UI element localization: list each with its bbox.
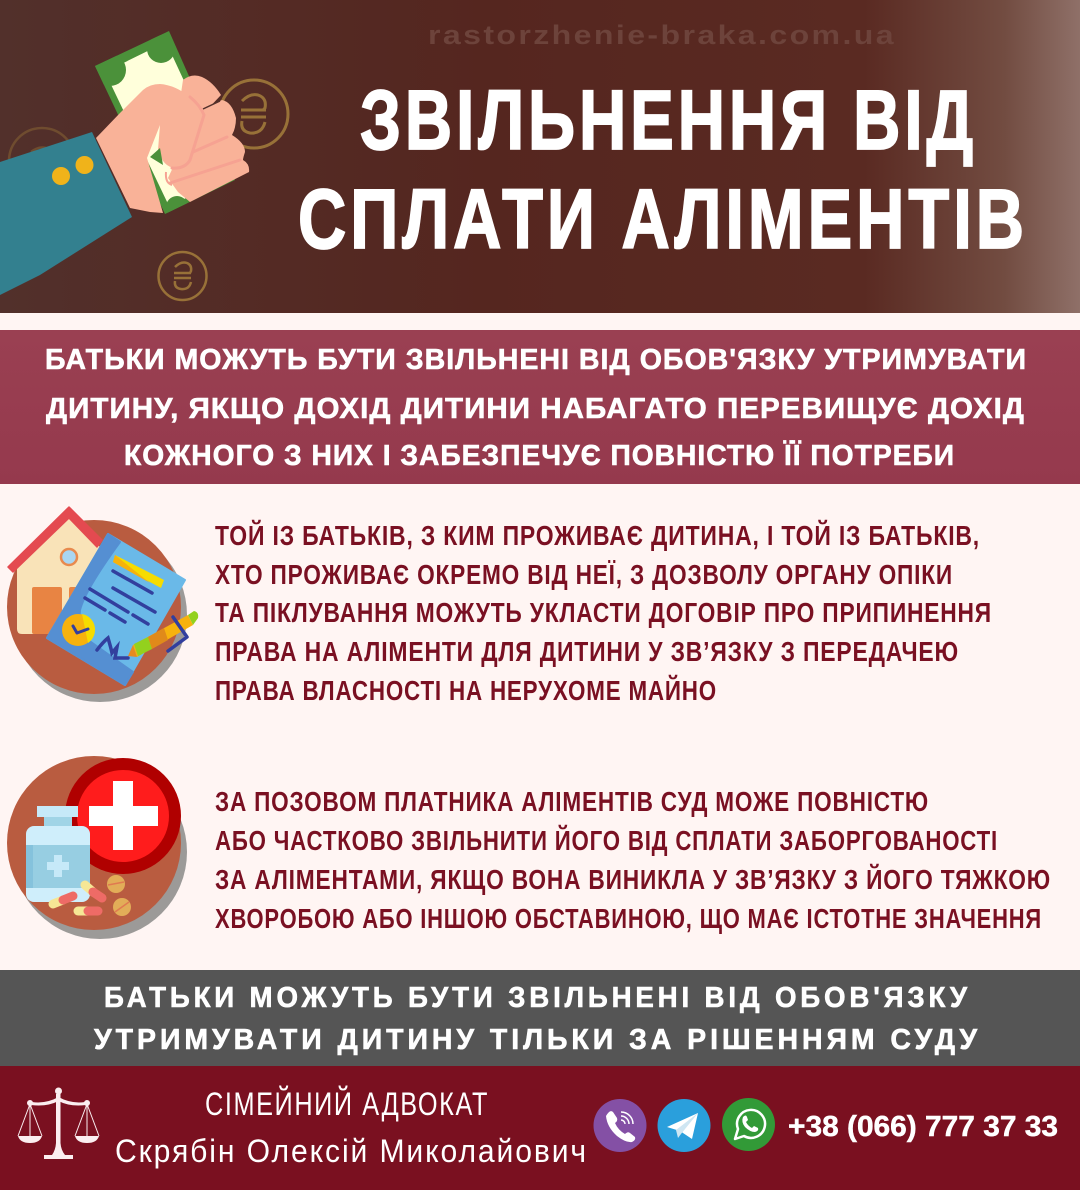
icon: viber: [594, 1099, 646, 1152]
text block: debt relief: [215, 786, 1051, 934]
panel: intro band: [0, 330, 1080, 484]
intro text: БАТЬКИ МОЖУТЬ БУТИ ЗВІЛЬНЕНІ ВІД ОБОВ'ЯЗКУ УТРИМУВАТИ: [45, 344, 1027, 376]
intro text: [45, 344, 1027, 472]
court decision text: УТРИМУВАТИ ДИТИНУ ТІЛЬКИ ЗА РІШЕННЯМ СУДУ: [94, 1024, 981, 1056]
icon: hryvnia coin right: [220, 80, 288, 148]
icon: telegram: [658, 1099, 710, 1152]
intro text: КОЖНОГО З НИХ І ЗАБЕЗПЕЧУЄ ПОВНІСТЮ ЇЇ ПОТРЕБИ: [124, 439, 955, 472]
panel: court decision band: [0, 970, 1080, 1066]
title: [298, 73, 1028, 266]
panel: header: [0, 0, 1080, 313]
court decision text: [94, 982, 981, 1056]
icon: house and contract: [7, 507, 198, 702]
icon: hryvnia coin back left: [9, 128, 75, 194]
lawyer name: [115, 1086, 588, 1169]
panel: footer: [0, 1066, 1080, 1190]
icon: whatsapp: [722, 1098, 775, 1151]
icon: scales: [18, 1088, 99, 1159]
watermark: rastorzhenie-braka.com.ua: [428, 20, 896, 50]
icon: sleeve: [0, 132, 132, 295]
icon: medicine: [7, 756, 187, 939]
phone number: +38 (066) 777 37 33: [788, 1111, 1058, 1143]
lawyer name: Скрябін Олексій Миколайович: [115, 1133, 588, 1169]
intro text: ДИТИНУ, ЯКЩО ДОХІД ДИТИНИ НАБАГАТО ПЕРЕВИЩУЄ ДОХІД: [46, 393, 1025, 425]
lawyer name: СІМЕЙНИЙ АДВОКАТ: [205, 1086, 489, 1122]
text block: property agreement: [215, 519, 992, 706]
text block: property agreement: ПРАВА ВЛАСНОСТІ НА НЕРУХОМЕ МАЙНО: [215, 674, 717, 706]
text block: debt relief: ЗА ПОЗОВОМ ПЛАТНИКА АЛІМЕНТІВ СУД МОЖЕ ПОВНІСТЮ: [215, 786, 929, 817]
court decision text: БАТЬКИ МОЖУТЬ БУТИ ЗВІЛЬНЕНІ ВІД ОБОВ'ЯЗКУ: [104, 982, 971, 1014]
icon: banknote: [94, 31, 235, 218]
icon: hand fist: [96, 76, 249, 213]
icon: hryvnia coin bottom: [158, 252, 206, 300]
